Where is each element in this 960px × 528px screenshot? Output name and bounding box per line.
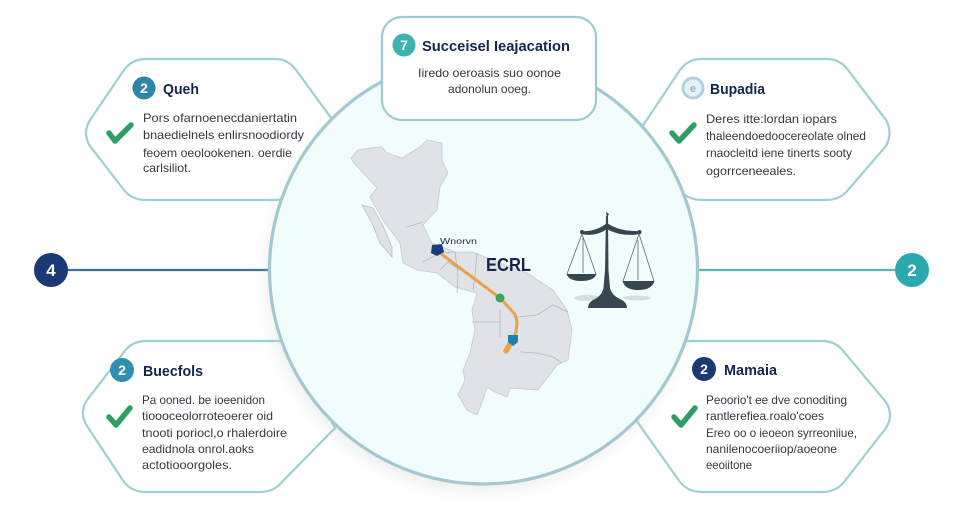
badge: right node 2 (895, 253, 929, 287)
text: top-left: feoem oeolookenen. oerdie (143, 146, 292, 160)
text: top-right: thaleendoedoocereolate olned (706, 129, 866, 143)
icon: check top-right (672, 125, 694, 141)
text: bottom-left: Pa ooned. be ioeenidon (142, 393, 265, 407)
text: top-right: rnaocleitd iene tinerts sooty (706, 146, 852, 160)
badge: bottom-right (692, 357, 716, 381)
text: top-left: carlsiliot. (143, 161, 191, 175)
panel: bottom-right hexagon (636, 341, 890, 492)
badge: bottom-right: 2 (700, 361, 708, 377)
text: bottom-left: tnooti poriocl,o rhalerdoire (142, 426, 287, 440)
text: top (418, 66, 561, 96)
text: bottom-right: nanilenocoeriiop/aoeone (706, 442, 837, 456)
map: peninsula (362, 205, 392, 257)
badge: top-left (132, 76, 156, 100)
panel content: top-right (672, 78, 866, 178)
panel: top-left hexagon (86, 59, 340, 200)
panel: top-right hexagon (640, 59, 890, 200)
left connector line (66, 269, 272, 271)
heading: top: Succeisel Ieajacation (422, 38, 570, 55)
text: bottom-right: rantlerefiea.roalo'coes (706, 409, 824, 423)
marker: end (508, 335, 518, 346)
badge: top (392, 34, 416, 56)
heading: bottom-left: Buecfols (143, 363, 203, 380)
text: bottom-right: Ereo oo o ieoeon syrreoniiue, (706, 426, 857, 440)
text: top-right: ogorrceneeales. (706, 164, 796, 178)
badge: right node 2: 2 (907, 261, 917, 280)
badge: bottom-left: 2 (118, 362, 126, 378)
badge: top-right (683, 78, 703, 98)
badge: bottom-left (110, 358, 134, 382)
heading: bottom-right: Mamaia (724, 362, 778, 379)
marker: middle (496, 294, 504, 302)
badge: top: 7 (400, 37, 408, 53)
map label: small: Wnorvn (440, 237, 477, 246)
panel content: top-left (109, 76, 304, 175)
text: top: Iiredo oeroasis suo oonoe (418, 66, 561, 80)
badge: top-left: 2 (140, 80, 148, 96)
disc shadow (267, 65, 693, 491)
central circle (270, 56, 698, 484)
right connector line (696, 269, 897, 271)
panel: bottom-left hexagon (83, 341, 335, 492)
map: internal borders (407, 222, 568, 363)
heading: top-right: Bupadia (710, 81, 766, 98)
map label: ECRL: ECRL (486, 255, 531, 275)
badge: left node: 4 (46, 261, 56, 280)
marker: start (431, 244, 444, 256)
text: bottom-right: eeoiitone (706, 458, 752, 472)
text: bottom-left: tioooceolorroteoerer oid (142, 409, 273, 423)
badge: top-right: e (690, 83, 696, 95)
text: top: adonolun ooeg. (448, 82, 531, 96)
text: bottom-right: Peoorio't ee dve conoditing (706, 393, 847, 407)
panel content: bottom-left (109, 358, 287, 472)
text: bottom-left: eadidnola onrol.aoks (142, 442, 254, 456)
map: region (351, 140, 572, 415)
text: top-left: Pors ofarnoenecdaniertatin (143, 111, 297, 125)
text: bottom-left: actotiooorgoles. (142, 458, 232, 472)
route: orange line (440, 253, 517, 351)
text: bottom-right (706, 393, 857, 472)
text: top-left (143, 111, 304, 175)
text: top-right: Deres itte:lordan iopars (706, 112, 837, 126)
text: bottom-left (142, 393, 287, 472)
icon: check top-left (109, 125, 131, 141)
text: top-right (706, 112, 866, 178)
heading: top-left: Queh (163, 81, 199, 98)
text: top-left: bnaedielnels enlirsnoodiordy (143, 128, 304, 142)
badge: left node (34, 253, 68, 287)
icon: check bottom-left (109, 408, 130, 425)
panel: top box (382, 17, 596, 120)
icon: check bottom-right (674, 408, 695, 425)
icon: scales of justice (566, 212, 654, 308)
panel content: bottom-right (674, 357, 857, 472)
